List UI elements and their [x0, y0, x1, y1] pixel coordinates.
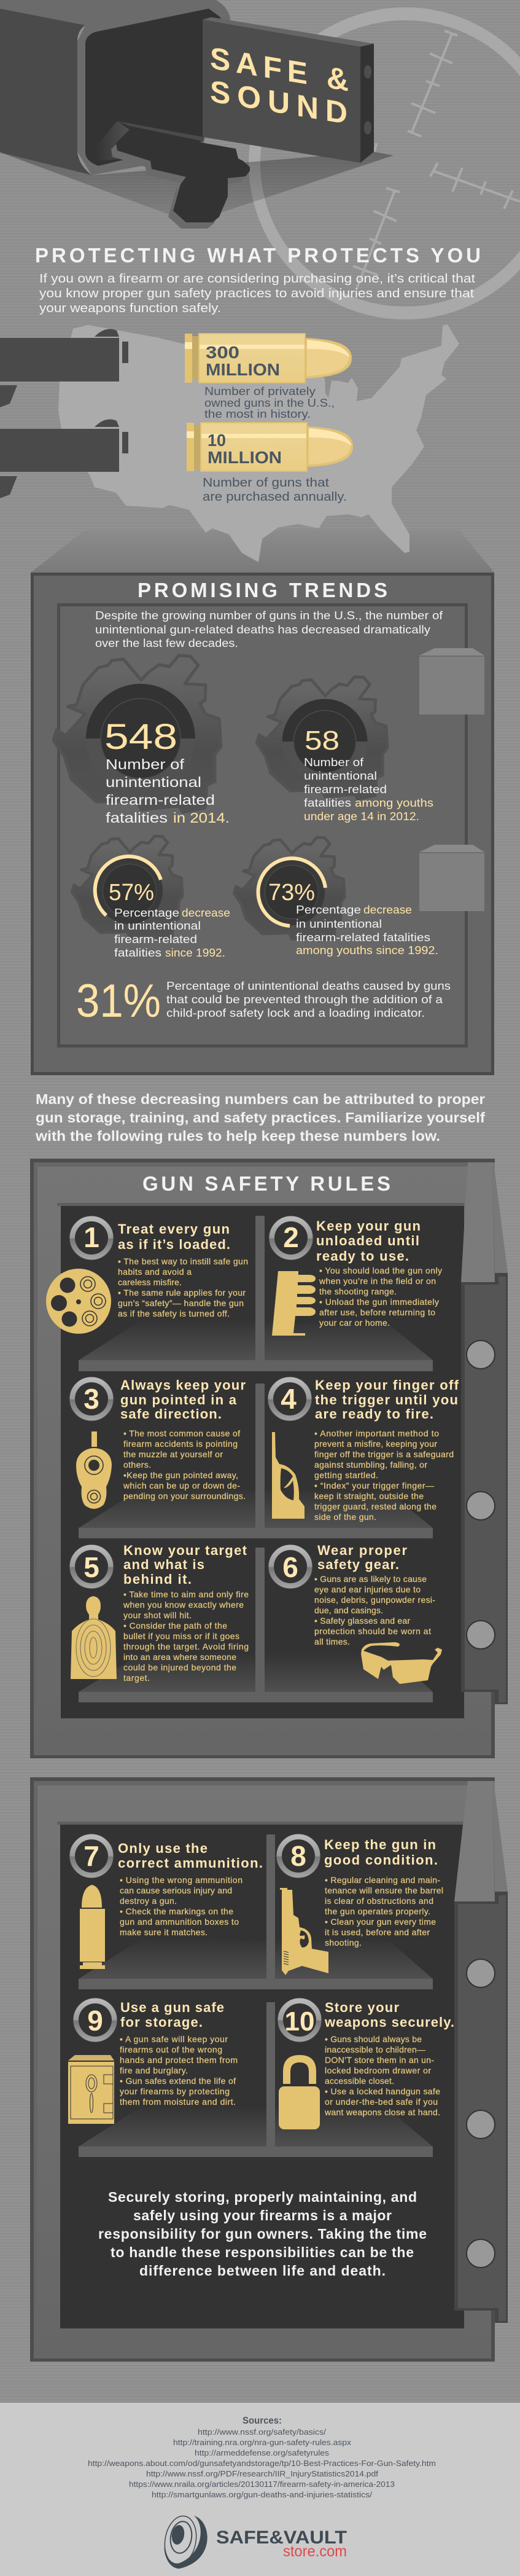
heading: Keep your finger off: [315, 1377, 459, 1393]
number badge: 10: [285, 2006, 314, 2037]
gear dial: [257, 677, 387, 799]
sources list: [88, 2416, 436, 2499]
icon: pistol: [280, 1888, 328, 1975]
heading: ready to use.: [316, 1248, 409, 1264]
caption: that could be prevented through the addition of a: [166, 993, 443, 1006]
heading: Use a gun safe: [120, 2000, 224, 2015]
safe body: [30, 1777, 495, 2362]
body: all times.: [314, 1637, 350, 1646]
progress arc: [95, 856, 161, 915]
title: [210, 40, 349, 131]
closing statement: Securely storing, properly maintaining, and: [108, 2189, 417, 2205]
heading: the trigger until you: [315, 1392, 458, 1407]
bullet 2 shape: [187, 423, 353, 471]
caption: firearm-related: [106, 792, 215, 808]
sources list: http://armeddefense.org/safetyrules: [195, 2448, 330, 2457]
heading: [317, 1543, 407, 1572]
interior glow: [95, 121, 138, 161]
number: 57%: [109, 880, 154, 906]
number badge: [268, 1544, 312, 1589]
intro text: [95, 609, 443, 649]
number badge: [69, 1834, 114, 1878]
body: gun’s “safety”— handle the gun: [118, 1298, 244, 1308]
number badge: 5: [83, 1551, 99, 1583]
logo wordmark: SAFE&VAULT: [216, 2527, 347, 2548]
shelves: [79, 1834, 433, 2157]
caption: fatalities: [114, 947, 161, 959]
body: shooting.: [325, 1938, 362, 1948]
body: [123, 1428, 246, 1501]
bullet 1 number: [206, 343, 280, 379]
closing statement: responsibility for gun owners. Taking the time: [98, 2226, 427, 2242]
heading: [316, 1218, 421, 1264]
stat: 73%: [234, 837, 438, 957]
icon: trigger guard: [272, 1432, 305, 1519]
heading: safety gear.: [317, 1557, 399, 1572]
caption: Number of: [106, 756, 185, 772]
heading: Store your: [325, 2000, 399, 2015]
number badge: [69, 1216, 114, 1260]
gear dial: [234, 837, 344, 941]
panel: gun safety rules safe, rules 1-6: [30, 1159, 508, 1758]
safe interior: [85, 9, 220, 166]
body: • Check the markings on the: [120, 1906, 233, 1916]
caption: Percentage: [296, 904, 361, 916]
body: [314, 1428, 454, 1522]
body: the muzzle at yourself or: [123, 1449, 223, 1459]
icon: shooting target: [71, 1596, 117, 1679]
heading: and what is: [123, 1557, 204, 1572]
body: after use, before returning to: [319, 1307, 435, 1317]
body: accessible closet.: [325, 2076, 394, 2086]
bullet 1 caption: [204, 385, 335, 420]
heading: [118, 1221, 230, 1252]
body: keep it straight, outside the: [314, 1491, 424, 1501]
sources list: http://weapons.about.com/od/gunsafetyandstorage/tp/10-Best-Practices-For-Gun-Safety.htm: [88, 2459, 436, 2468]
heading: are ready to fire.: [315, 1406, 433, 1422]
body: careless misfire.: [118, 1277, 182, 1287]
caption: in 2014.: [173, 810, 230, 826]
heading: weapons securely.: [324, 2014, 454, 2030]
rule 7: [69, 1834, 263, 1969]
number: 31%: [76, 975, 161, 1027]
pistol: [116, 130, 250, 222]
caption: Percentage of unintentional deaths caused by guns: [166, 980, 451, 992]
body: getting startled.: [314, 1470, 378, 1480]
heading: good condition.: [324, 1852, 438, 1868]
heading: Treat every gun: [118, 1221, 230, 1237]
body: [324, 2034, 440, 2117]
heading: behind it.: [123, 1572, 192, 1587]
heading: Always keep your: [120, 1377, 246, 1393]
caption: in unintentional: [114, 920, 201, 932]
body: when you’re in the field or on: [319, 1276, 436, 1286]
hinge lower: [419, 845, 484, 911]
footer panel: [0, 2403, 520, 2576]
number badge: 8: [290, 1840, 306, 1872]
heading: Keep your gun: [316, 1218, 421, 1234]
body: or under-the-bed safe if you: [325, 2097, 438, 2107]
body: side of the gun.: [314, 1512, 376, 1522]
bullet 1 caption: the most in history.: [204, 408, 311, 420]
body: can cause serious injury and: [120, 1885, 232, 1895]
bullet 1 caption: Number of privately: [204, 385, 316, 397]
body: target.: [123, 1673, 150, 1683]
interior shelf: [117, 121, 203, 141]
body: due, and casings.: [314, 1605, 383, 1615]
bullet 1 number: 300: [206, 343, 239, 362]
heading: unloaded until: [316, 1233, 419, 1248]
icon: bullet: [80, 1885, 105, 1969]
heading: [123, 1543, 247, 1587]
sources list: http://smartgunlaws.org/gun-deaths-and-injuries-statistics/: [152, 2490, 372, 2499]
caption: fatalities: [304, 797, 351, 809]
body: DON’T store them in an un-: [325, 2055, 434, 2065]
caption: firearm-related: [114, 933, 197, 945]
intro text: over the last few decades.: [95, 637, 238, 649]
number badge: 1: [83, 1221, 99, 1253]
intro text: Despite the growing number of guns in the U.S., the number of: [95, 609, 443, 622]
rule 2: [269, 1216, 442, 1336]
caption: [114, 907, 230, 959]
heading: [324, 1837, 438, 1868]
number badge: 6: [282, 1551, 298, 1583]
trends safe lid: [31, 530, 494, 573]
body: • A gun safe will keep your: [120, 2034, 228, 2044]
intro paragraph: you know proper gun safety practices to avoid injuries and ensure that: [39, 287, 474, 300]
body: make sure it matches.: [120, 1927, 208, 1937]
icon: safety glasses: [361, 1642, 442, 1684]
caption: firearm-related: [304, 783, 387, 796]
caption: fatalities: [106, 810, 168, 826]
rule 9: [68, 1998, 238, 2124]
icon: padlock: [279, 2055, 320, 2129]
body: noise, debris, gunpowder resi-: [314, 1595, 435, 1605]
safe body: [30, 1159, 495, 1758]
body: [314, 1574, 435, 1646]
heading: as if it’s loaded.: [118, 1237, 230, 1252]
body: against stumbling, falling, or: [314, 1460, 427, 1470]
gun silhouette 2: [0, 420, 128, 498]
heading: correct ammunition.: [118, 1855, 263, 1871]
body: want weapons close at hand.: [324, 2107, 440, 2117]
title: SAFE &: [210, 40, 349, 98]
body: into an area where someone: [123, 1652, 236, 1662]
body: [319, 1266, 442, 1328]
heading: protecting what protects you: PROTECTING WHAT PROTECTS YOU: [35, 244, 481, 267]
body: through the target. Avoid firing: [123, 1642, 249, 1651]
heading: safe direction.: [120, 1406, 222, 1422]
caption: since 1992.: [165, 947, 225, 959]
number badge: [268, 1377, 312, 1421]
heading: Know your target: [123, 1543, 247, 1558]
heading: gun pointed in a: [120, 1392, 237, 1407]
body: • The best way to instill safe gun: [118, 1256, 248, 1266]
body: • Regular cleaning and main-: [325, 1875, 440, 1885]
body: locked bedroom drawer or: [325, 2065, 431, 2075]
stat: 57%: [72, 836, 230, 959]
door bolts: [467, 1341, 495, 1649]
caption: [296, 904, 438, 957]
bullet 2 caption: are purchased annually.: [203, 490, 347, 504]
caption: [106, 756, 230, 826]
caption: unintentional: [304, 770, 377, 782]
sources list: Sources:: [243, 2416, 282, 2426]
heading: [118, 1841, 263, 1871]
body: when you know exactly where: [123, 1600, 244, 1610]
caption: among youths since 1992.: [296, 944, 438, 957]
door side face: [360, 44, 374, 163]
scope crosshair ring: [249, 7, 520, 319]
body: the shooting range.: [319, 1286, 397, 1296]
number badge: [276, 1834, 320, 1878]
door hinges: [364, 65, 371, 135]
logo store.com: store.com: [283, 2543, 347, 2560]
body: destroy a gun.: [120, 1896, 177, 1906]
number badge: [277, 1998, 322, 2042]
icon: revolver cylinder: [46, 1269, 111, 1334]
stat: 31%: [76, 975, 451, 1027]
intro paragraph: If you own a firearm or are considering purchasing one, it’s critical that: [39, 272, 476, 286]
body: hands and protect them from: [120, 2055, 238, 2065]
body: could be injured beyond the: [123, 1662, 236, 1672]
bullet 2 number: 10: [208, 431, 226, 450]
hinge upper: [419, 648, 484, 714]
body: is clear of obstructions and: [325, 1896, 433, 1906]
number badge: [69, 1544, 114, 1589]
map of the United States: [58, 324, 459, 562]
body: which can be up or down de-: [123, 1481, 240, 1490]
heading: PROMISING TRENDS: [138, 579, 387, 601]
inner door outline: [59, 605, 467, 1046]
rule 6: [268, 1543, 442, 1684]
stat: 548: [53, 656, 230, 826]
heading: Wear proper: [317, 1543, 407, 1558]
safe side face: [0, 9, 91, 175]
heading: Only use the: [118, 1841, 208, 1856]
intro paragraph: [39, 272, 476, 315]
body: [123, 1589, 249, 1683]
title: SOUND: [210, 73, 347, 131]
body: pending on your surroundings.: [123, 1491, 246, 1501]
caption: firearm-related fatalities: [296, 931, 430, 944]
body: your shot will hit.: [123, 1610, 192, 1620]
body: finger off the trigger is a safeguard: [314, 1449, 454, 1459]
body: • Unload the gun immediately: [319, 1297, 439, 1307]
caption: [304, 756, 433, 823]
body: your car or home.: [319, 1318, 390, 1328]
body: as if the safety is turned off.: [118, 1309, 230, 1318]
caption: decrease: [182, 907, 230, 919]
body: trigger guard, rested along the: [314, 1501, 437, 1511]
rule 10: [277, 1998, 454, 2129]
bullet 1 shape: [185, 334, 352, 383]
sources list: https://www.nraila.org/articles/20130117/firearm-safety-in-america-2013: [129, 2480, 395, 2489]
body: it is used, before and after: [325, 1927, 430, 1937]
hero illustration: open safe and pistol: [0, 0, 394, 229]
body: firearm accidents is pointing: [123, 1439, 238, 1449]
caption: [166, 980, 451, 1019]
transition paragraph: with the following rules to help keep these numbers low.: [35, 1128, 440, 1144]
door front face: [203, 20, 360, 163]
gear dial: [72, 836, 182, 939]
body: •Keep the gun pointed away,: [123, 1470, 238, 1480]
sources list: http://training.nra.org/nra-gun-safety-rules.aspx: [173, 2438, 352, 2447]
rule 8: [276, 1834, 443, 1975]
body: • Safety glasses and ear: [314, 1616, 410, 1626]
body: firearms out of the wrong: [120, 2045, 222, 2054]
floor shadow: [0, 152, 394, 215]
heading: [315, 1377, 459, 1422]
body: • Clean your gun every time: [325, 1917, 436, 1927]
body: • “Index” your trigger finger—: [314, 1481, 434, 1490]
open door: [461, 1162, 508, 1704]
number badge: [73, 1998, 117, 2042]
caption: Number of: [304, 756, 364, 769]
bullet 2 caption: [203, 476, 347, 504]
door bolts: [467, 1959, 495, 2268]
safe rim: [0, 0, 230, 175]
body: [118, 1256, 248, 1318]
panel: safe, rules 7-10: [30, 1777, 508, 2362]
number: 73%: [268, 880, 315, 906]
body: them from moisture and dirt.: [120, 2097, 236, 2107]
closing statement: difference between life and death.: [139, 2263, 386, 2279]
rule 1: [46, 1216, 248, 1334]
transition paragraph: gun storage, training, and safety practices. Familiarize yourself: [36, 1110, 485, 1126]
bullet stat: 10 million: [187, 423, 353, 504]
body: • Using the wrong ammunition: [120, 1875, 243, 1885]
heading: Keep the gun in: [324, 1837, 436, 1852]
body: • Gun safes extend the life of: [120, 2076, 236, 2086]
bullet 1 caption: owned guns in the U.S.,: [204, 397, 335, 409]
body: gun and ammunition boxes to: [120, 1917, 239, 1927]
gun silhouette 1: [0, 329, 128, 407]
body: eye and ear injuries due to: [314, 1584, 421, 1594]
bullet 2 number: MILLION: [208, 448, 282, 467]
icon: pistol magazine: [272, 1271, 316, 1336]
caption: under age 14 in 2012.: [304, 810, 419, 823]
panel: promising trends safe: [32, 574, 492, 1074]
number badge: 4: [281, 1383, 297, 1415]
heading: for storage.: [120, 2014, 203, 2030]
caption: unintentional: [106, 774, 201, 790]
gear dial: [53, 656, 221, 812]
body: • Consider the path of the: [123, 1621, 227, 1631]
body: tenance will ensure the barrel: [325, 1885, 443, 1895]
closing statement: safely using your firearms is a major: [133, 2207, 392, 2223]
heading: [324, 2000, 454, 2030]
bullet 2 number: [208, 431, 282, 467]
heading: [120, 1377, 246, 1422]
body: [120, 2034, 238, 2107]
body: your firearms by protecting: [120, 2086, 230, 2096]
closing statement: to handle these responsibilities can be the: [111, 2244, 414, 2260]
safe front: [32, 574, 492, 1074]
body: • Use a locked handgun safe: [325, 2086, 440, 2096]
caption: Percentage: [114, 907, 179, 919]
heading: GUN SAFETY RULES: [142, 1172, 390, 1195]
body: • Guns are as likely to cause: [314, 1574, 427, 1584]
caption: among youths: [355, 797, 433, 809]
number: 58: [305, 726, 340, 756]
body: • Guns should always be: [325, 2034, 422, 2044]
bullet 1 number: MILLION: [206, 360, 280, 379]
sources list: http://www.nssf.org/PDF/research/IIR_InjuryStatistics2014.pdf: [146, 2469, 378, 2478]
body: • Take time to aim and only fire: [123, 1589, 249, 1599]
number: 548: [104, 717, 177, 757]
body: protection should be worn at: [314, 1626, 431, 1636]
intro text: unintentional gun-related deaths has decreased dramatically: [95, 624, 430, 636]
shelves: [79, 1216, 433, 1702]
pistol shadow: [111, 136, 245, 229]
heading: [120, 2000, 224, 2030]
closing statement: [98, 2189, 427, 2279]
body: • The most common cause of: [123, 1428, 240, 1438]
body: fire and burglary.: [120, 2065, 188, 2075]
rule 5: [69, 1543, 249, 1683]
number badge: 7: [83, 1840, 99, 1872]
number badge: 9: [87, 2005, 103, 2037]
bullet 2 caption: Number of guns that: [203, 476, 329, 490]
body: others.: [123, 1460, 151, 1470]
sources list: http://www.nssf.org/safety/basics/: [198, 2427, 326, 2437]
number badge: [69, 1377, 114, 1421]
logo mark: [161, 2513, 208, 2569]
icon: pistol top view: [76, 1431, 112, 1509]
number badge: 3: [83, 1383, 99, 1415]
bullet stat: 300 million: [185, 334, 352, 420]
body: inaccessible to children—: [325, 2045, 425, 2054]
logo: [161, 2513, 347, 2569]
body: • The same rule applies for your: [118, 1288, 246, 1298]
caption: decrease: [363, 904, 412, 916]
caption: in unintentional: [296, 918, 382, 930]
stat: 58: [257, 677, 433, 823]
body: [325, 1875, 443, 1948]
body: • Another important method to: [314, 1428, 439, 1438]
body: bullet if you miss or if it goes: [123, 1631, 239, 1641]
transition paragraph: [35, 1091, 485, 1144]
rule 3: [69, 1377, 246, 1509]
body: habits and avoid a: [118, 1267, 192, 1277]
progress arc: [258, 858, 325, 926]
body: the gun operates properly.: [325, 1906, 430, 1916]
caption: child-proof safety lock and a loading indicator.: [166, 1007, 425, 1019]
number badge: [269, 1216, 313, 1260]
body: prevent a misfire, keeping your: [314, 1439, 437, 1449]
body: • You should load the gun only: [319, 1266, 442, 1275]
door top face: [203, 17, 374, 47]
transition paragraph: Many of these decreasing numbers can be attributed to proper: [36, 1091, 485, 1107]
number badge: 2: [283, 1221, 299, 1253]
body: [120, 1875, 243, 1937]
intro paragraph: your weapons function safely.: [39, 302, 221, 315]
rule 4: [268, 1377, 459, 1522]
icon: gun safe: [68, 2055, 114, 2124]
open door: [454, 1781, 508, 2323]
